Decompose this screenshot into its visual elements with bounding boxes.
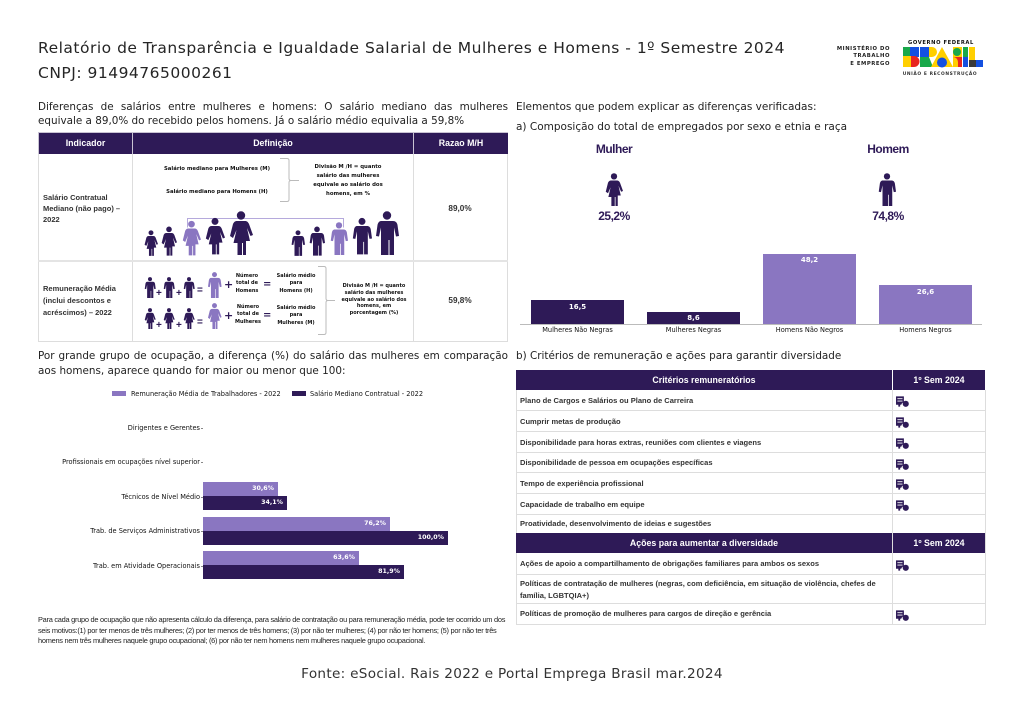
icons: homens soma: + [156,288,162,299]
chart: ocupação: Trab. em Atividade Operacionais [93,562,200,570]
table header: Razao M/H [439,138,483,148]
row: Políticas de promoção de mulheres para cargos de direção e gerência [520,609,771,618]
chart: composição: Homens Não Negros [776,326,843,334]
chart: composição [520,142,982,334]
definition: remuneração média: Número [237,304,259,310]
row [516,473,986,494]
legend [112,390,423,398]
heading: critérios: b) Critérios de remuneração e ações para garantir diversidade [516,350,841,362]
definition: remuneração média: equivale ao salário dos [341,297,407,303]
row: Tempo de experiência profissional [520,479,644,488]
row [516,604,986,625]
row: Políticas de contratação de mulheres (negras, com deficiência, em situação de violência, chefes de família, LGBTQIA+) [520,579,876,600]
definition: remuneração média: porcentagem (%) [350,310,398,316]
row [516,453,986,473]
row [516,553,986,575]
icons: homens row [292,211,399,256]
heading: composição: a) Composição do total de empregados por sexo e etnia e raça [516,121,847,133]
table header: Indicador [66,138,105,148]
row label: salário contratual [43,193,120,224]
definition: remuneração média: Homens [236,288,258,294]
text: grande grupo de ocupação: Por grande grupo de ocupação, a diferença (%) do salário das mulheres em comparação aos homens, aparece quando for maior ou menor que 100: [38,350,508,376]
definition: salário mediano: Salário mediano para Mulheres (M) [164,166,270,172]
definition: salário mediano: Salário mediano para Homens (H) [166,189,268,195]
legend: Remuneração Média de Trabalhadores - 2022 [131,390,281,398]
definition: remuneração média: Divisão M /H = quanto [343,283,405,289]
header: ações para diversidade [516,533,892,553]
source: Fonte: eSocial. Rais 2022 e Portal Emprega Brasil mar.2024 [301,666,723,682]
logo: governo federal brasil: GOVERNO FEDERAL [908,40,974,46]
row: Capacidade de trabalho em equipe [520,500,645,509]
definition: remuneração média: Homens (H) [279,288,313,294]
chart: ocupação: 34,1% [261,499,283,506]
logo: ministério do trabalho e emprego: MINISTÉRIO DO [837,46,890,52]
row: Ações de apoio a compartilhamento de obrigações familiares para ambos os sexos [520,559,819,568]
bars: atividade operacionais [203,551,359,565]
definition: salário mediano: Divisão M /H = quanto [315,164,381,170]
definition: remuneração média: para [290,280,302,286]
title [38,39,785,82]
definition: remuneração média: = [263,310,271,321]
logo: ministério do trabalho e emprego: E EMPREGO [850,61,890,67]
definition: remuneração média: Número [236,273,258,279]
bars: técnicos [203,482,278,496]
chart: ocupação: Dirigentes e Gerentes [128,424,200,432]
row [516,432,986,453]
chart: ocupação: Técnicos de Nível Médio [121,493,200,501]
bars: serviços administrativos [203,517,390,531]
title: CNPJ: 91494765000261 [38,64,233,82]
table header: Definição [253,138,293,148]
row [516,411,986,432]
bars: serviços administrativos: 76,2% [364,520,386,527]
chart: ocupação: 100,0% [418,534,444,541]
row [516,494,986,515]
header: critérios remuneratórios [516,370,892,390]
label: mulher: Mulher [596,142,632,156]
footnote: seis motivos:(1) por ter menos de três mulheres; (2) por ter menos de três homens; (3) por não ter mulheres; (4) por não ter homens; (5) por não ter três [38,626,496,634]
footnote [38,615,506,645]
header: 1º sem 2024 [893,370,985,390]
header: ações para diversidade: Ações para aumentar a diversidade [630,538,778,548]
definition: salário mediano [164,158,383,228]
definition: remuneração média: total de [237,311,259,317]
chart: ocupação: Profissionais em ocupações nível superior [62,458,200,466]
header: critérios remuneratórios: Critérios remuneratórios [652,375,756,385]
bar: mulheres negras: 8,6 [687,314,700,322]
row: Disponibilidade de pessoa em ocupações específicas [520,458,713,467]
value: 59,8%: 59,8% [448,296,472,305]
bars: atividade operacionais: 63,6% [333,554,355,561]
value: 74,8%: 74,8% [872,209,904,223]
table: indicadores [38,132,508,342]
footnote: homens nem três mulheres naquele grupo ocupacional; (6) por não ter nem homens nem mulheres naquele grupo ocupacional. [38,636,425,645]
table: critérios remuneratórios [516,390,986,624]
bar: homens não negros: 48,2 [801,256,818,264]
bar: homens não negros [763,254,856,324]
header: 1º sem 2024 [893,533,985,553]
value: 89,0%: 89,0% [448,204,472,213]
bar: homens negros: 26,6 [917,288,934,296]
title: Relatório de Transparência e Igualdade Salarial de Mulheres e Homens - 1º Semestre 2024 [38,39,785,57]
header: 1º sem 2024: 1º Sem 2024 [913,375,965,385]
bar: mulheres negras [647,312,740,324]
row: Proatividade, desenvolvimento de ideias e sugestões [520,519,711,528]
definition: remuneração média [144,266,407,335]
label: homem: Homem [867,142,909,156]
row label: remuneração média: acréscimos) – 2022 [43,308,112,317]
logo: ministério do trabalho e emprego [837,45,890,67]
logo: governo federal brasil: UNIÃO E RECONSTRUÇÃO [903,70,977,77]
icons: mulheres row [144,211,253,256]
icons: check [896,396,909,621]
icons: homens soma: + [176,288,182,299]
icons: mulheres soma [144,303,222,331]
definition: remuneração média: + [224,309,233,322]
row: Plano de Cargos e Salários ou Plano de Carreira [520,396,693,405]
icon: homem [878,173,896,206]
row label: remuneração média: (inclui descontos e [43,296,111,305]
row label: salário contratual: Mediano (não pago) – [43,204,120,213]
logo: ministério do trabalho e emprego: TRABALHO [853,53,890,59]
definition: remuneração média: Salário médio [277,305,315,311]
chart: composição: Mulheres Negras [666,326,721,334]
row label: remuneração média: Remuneração Média [43,284,116,293]
definition: remuneração média: Salário médio [277,273,315,279]
chart: ocupação: 81,9% [378,568,400,575]
chart: composição: Homens Negros [899,326,952,334]
icons: mulheres soma: + [176,320,182,331]
definition: remuneração média: Mulheres (M) [277,320,315,326]
row label: salário contratual: 2022 [43,215,60,224]
definition: remuneração média: = [263,279,271,290]
definition: remuneração média: total de [236,280,258,286]
definition: remuneração média: salário das mulheres [345,290,403,296]
bar: homens negros [879,285,972,324]
footnote: Para cada grupo de ocupação que não apresenta cálculo da diferença, para salário de contratação ou para remuneração média, pode ter ocorrido um dos [38,615,505,624]
bar: mulheres não negras [531,300,624,324]
bar: mulheres não negras: 16,5 [569,303,586,311]
definition: salário mediano: salário das mulheres [317,173,379,179]
logo: governo federal brasil [903,40,983,77]
row [516,390,986,411]
table header [38,132,508,154]
icons: homens soma [144,272,222,299]
header: 1º sem 2024: 1º Sem 2024 [913,538,965,548]
definition: remuneração média: homens, em [357,303,391,309]
legend: Salário Mediano Contratual - 2022 [310,390,423,398]
definition: remuneração média: + [224,278,233,291]
chart: ocupação [62,390,448,579]
row: Disponibilidade para horas extras, reuniões com clientes e viagens [520,438,761,447]
row: Cumprir metas de produção [520,417,621,426]
value: 25,2%: 25,2% [598,209,630,223]
definition: salário mediano: equivale ao salário dos [313,182,383,188]
icons: mulheres soma: + [156,320,162,331]
icons: homens soma: = [197,285,203,296]
definition: remuneração média: para [290,312,302,318]
chart: ocupação: Trab. de Serviços Administrativos [90,527,200,535]
row [516,575,986,604]
heading: elementos: Elementos que podem explicar as diferenças verificadas: [516,101,816,113]
bars: técnicos: 30,6% [252,485,274,492]
icon: mulher [606,173,623,206]
row label: remuneração média [43,284,116,317]
row label: salário contratual: Salário Contratual [43,193,108,202]
definition: salário mediano: homens, em % [326,191,370,197]
intro text: diferenças de salários: Diferenças de salários entre mulheres e homens: O salário mediano das mulheres equivale a 89,0% do recebido pelos homens. Já o salário médio equivalia a 59,8% [38,101,508,127]
icons: mulheres soma: = [197,317,203,328]
chart: composição: Mulheres Não Negras [542,326,613,334]
definition: remuneração média: Mulheres [235,319,261,325]
